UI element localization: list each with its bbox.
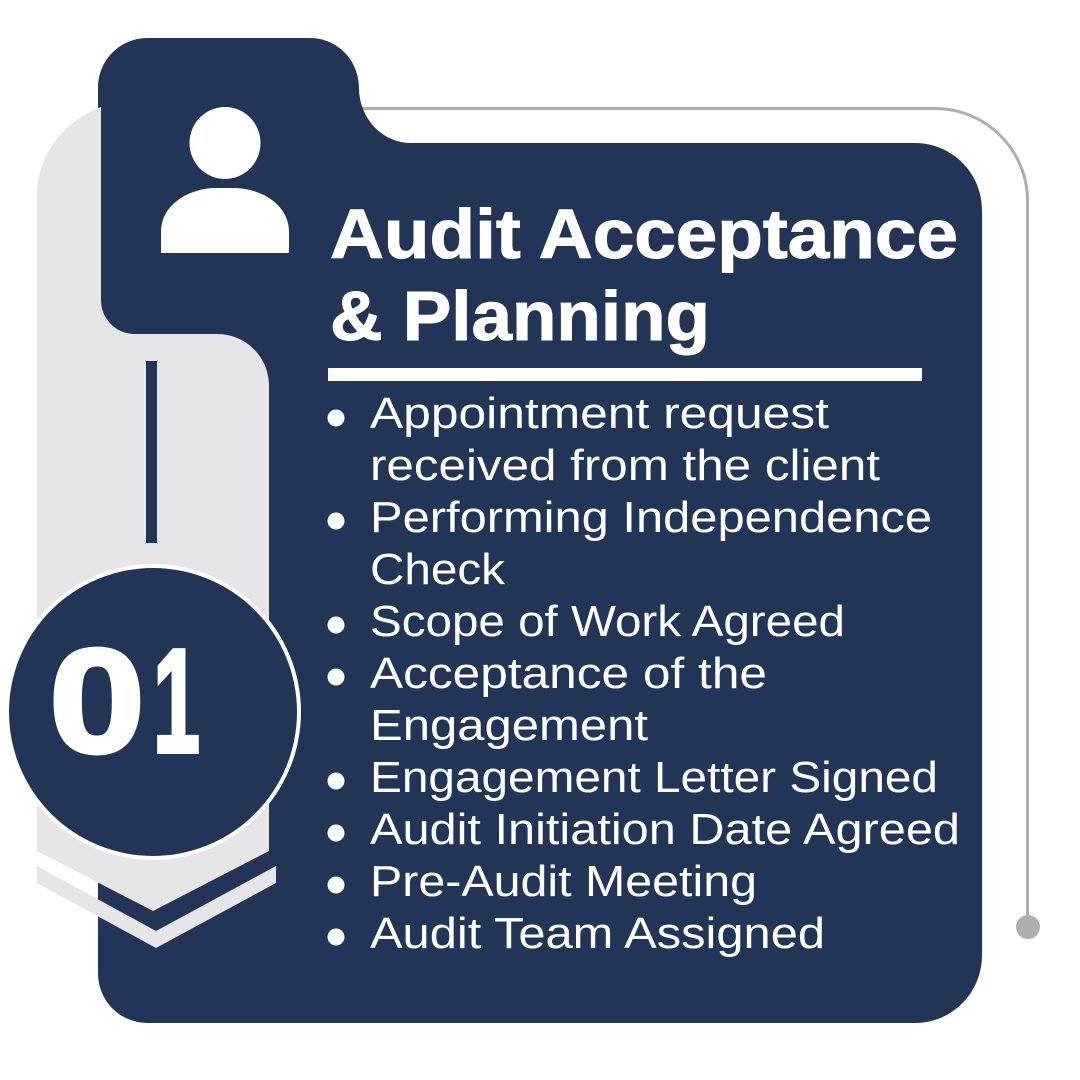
connector line [359,108,1040,939]
item: independence check [328,493,932,594]
number badge [5,564,301,860]
item: appointment request: Appointment request [370,389,829,438]
item: initiation date: Audit Initiation Date Agreed [370,805,960,854]
item: acceptance: Engagement [370,701,648,750]
chevron [37,866,276,948]
panel: grey ribbon [37,107,269,911]
item: appointment request: received from the client [370,441,880,490]
item: independence check: Performing Independence [370,493,932,542]
item: acceptance [328,649,767,750]
item: independence check: Check [370,545,506,594]
bullet list [328,389,960,958]
number badge: 1 [153,619,200,784]
title rule [328,368,922,381]
item: team assigned: Audit Team Assigned [370,909,825,958]
item: engagement letter: Engagement Letter Signed [370,753,938,802]
item: pre-audit meeting: Pre-Audit Meeting [370,857,757,906]
title: Audit Acceptance [330,195,958,273]
icon: person [161,107,289,253]
number badge: 0 [49,619,145,784]
item: scope of work: Scope of Work Agreed [370,597,845,646]
title: & Planning [330,277,710,355]
vertical bar [146,361,157,543]
item: acceptance: Acceptance of the [370,649,767,698]
panel: navy card [98,38,982,1023]
title [330,195,958,355]
item: appointment request [328,389,880,490]
